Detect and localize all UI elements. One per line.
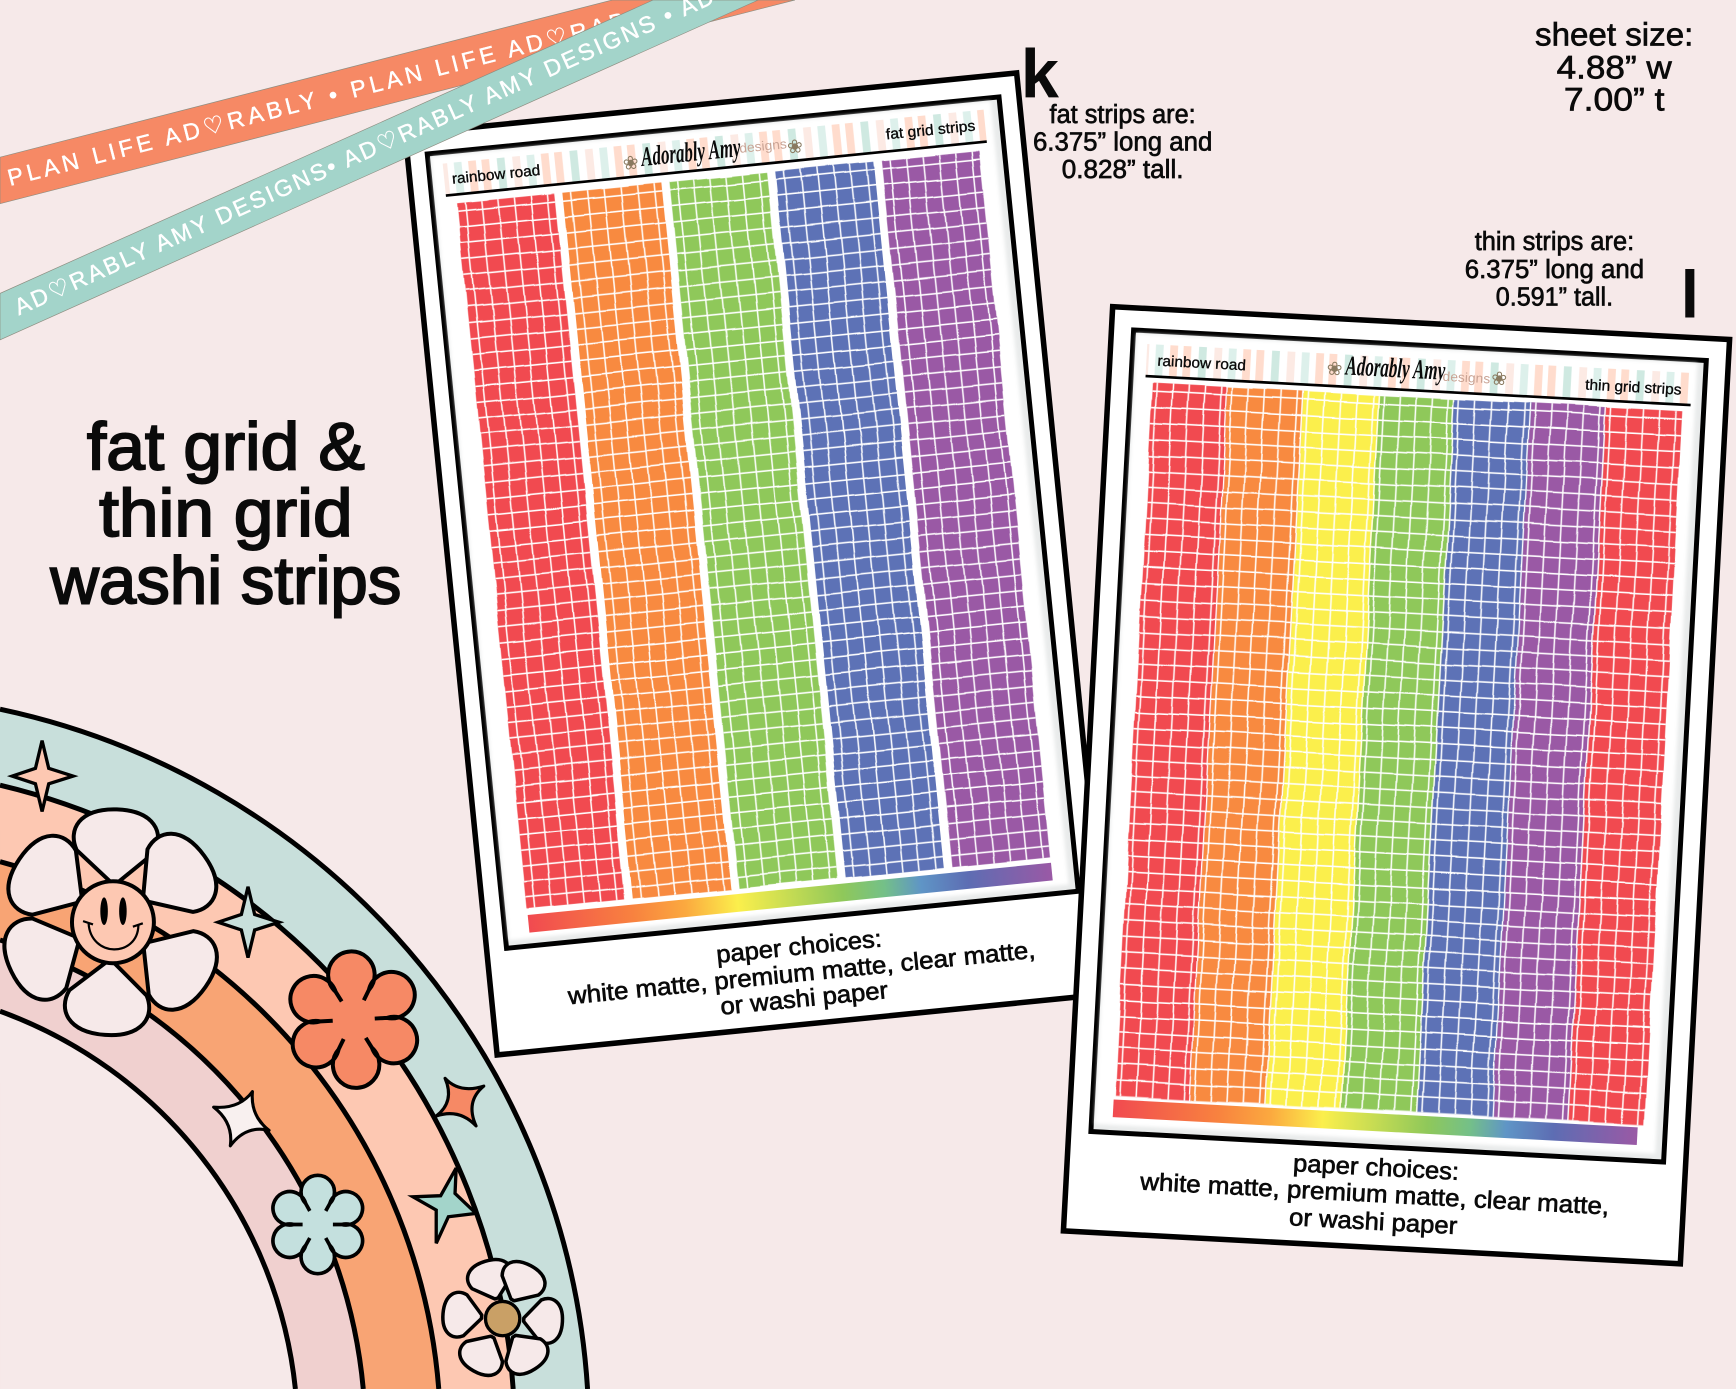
header label: rainbow road: rainbow road	[1157, 353, 1246, 374]
text: fat strip size: 6.375” long and	[1033, 129, 1212, 157]
text: sheet size	[1535, 16, 1693, 118]
rainbow arc	[0, 709, 588, 1389]
icon: teal flower	[273, 1175, 363, 1274]
panel: thin grid sheet	[1063, 307, 1730, 1264]
logo: ❀	[786, 135, 804, 158]
sheet card	[405, 73, 1109, 1055]
title: fat grid &	[87, 410, 365, 484]
logo: ❀	[1326, 358, 1343, 379]
letter k: k	[1021, 35, 1060, 112]
icon: white star	[214, 1092, 269, 1146]
header rule	[1146, 376, 1691, 405]
fat washi strips	[457, 151, 1050, 910]
coral washi tape: PLAN LIFE AD♡RABLY • PLAN LIFE AD♡RAB	[5, 7, 628, 191]
logo: ❀	[1491, 368, 1508, 389]
text: thin strip size	[1465, 228, 1644, 312]
text: sheet size: sheet size:	[1535, 16, 1693, 52]
title: thin grid	[99, 477, 353, 551]
text: sheet size: 4.88” w	[1557, 50, 1673, 86]
header label: thin grid strips: thin grid strips	[1585, 377, 1682, 399]
text: thin strip size: 0.591” tall.	[1496, 284, 1613, 312]
icon: smiley flower	[0, 808, 230, 1038]
title: washi strips	[49, 544, 401, 618]
sticker frame	[1091, 330, 1706, 1162]
caption: paper choices	[1137, 1142, 1611, 1248]
logo: ❀	[622, 152, 640, 174]
header rule	[446, 142, 987, 196]
header label: fat grid strips: fat grid strips	[885, 117, 976, 143]
caption: paper choices	[563, 910, 1039, 1036]
icon: teal star	[413, 1168, 476, 1243]
icon: coral star	[436, 1078, 484, 1126]
letter l: l	[1681, 259, 1699, 333]
logo: Adorably Amy	[1344, 349, 1446, 386]
icon: peach sparkle	[12, 741, 73, 812]
text: fat strip size: 0.828” tall.	[1062, 156, 1184, 184]
text: thin strip size: thin strips are:	[1475, 228, 1634, 256]
rainbow gradient bar	[528, 863, 1053, 933]
caption: paper choices: white matte, premium matte, clear matte,	[566, 937, 1037, 1010]
sticker frame	[427, 97, 1078, 948]
rainbow gradient bar	[1113, 1099, 1638, 1145]
text: fat strip size	[1033, 101, 1212, 184]
header stripes	[1146, 344, 1692, 405]
caption: paper choices: or washi paper	[719, 977, 889, 1021]
logo: Adorably Amy	[638, 131, 742, 172]
caption: paper choices: white matte, premium matte, clear matte,	[1139, 1169, 1610, 1221]
text: sheet size: 7.00” t	[1564, 82, 1665, 118]
text: thin strip size: 6.375” long and	[1465, 256, 1644, 284]
title	[49, 410, 401, 618]
text: fat strip size: fat strips are:	[1050, 101, 1196, 129]
icon: daisy	[441, 1255, 564, 1382]
logo: designs	[739, 136, 788, 156]
caption: paper choices: paper choices:	[1292, 1150, 1460, 1186]
header stripes	[443, 110, 987, 196]
caption: paper choices: paper choices:	[715, 925, 883, 969]
sheet card	[1063, 307, 1730, 1264]
thin washi strips	[1115, 383, 1682, 1124]
icon: coral flower	[288, 948, 419, 1091]
panel: fat grid sheet	[405, 73, 1109, 1055]
header label: rainbow road: rainbow road	[451, 162, 541, 188]
logo: designs	[1442, 369, 1491, 386]
caption: paper choices: or washi paper	[1288, 1204, 1458, 1240]
icon: teal sparkle	[218, 887, 279, 958]
